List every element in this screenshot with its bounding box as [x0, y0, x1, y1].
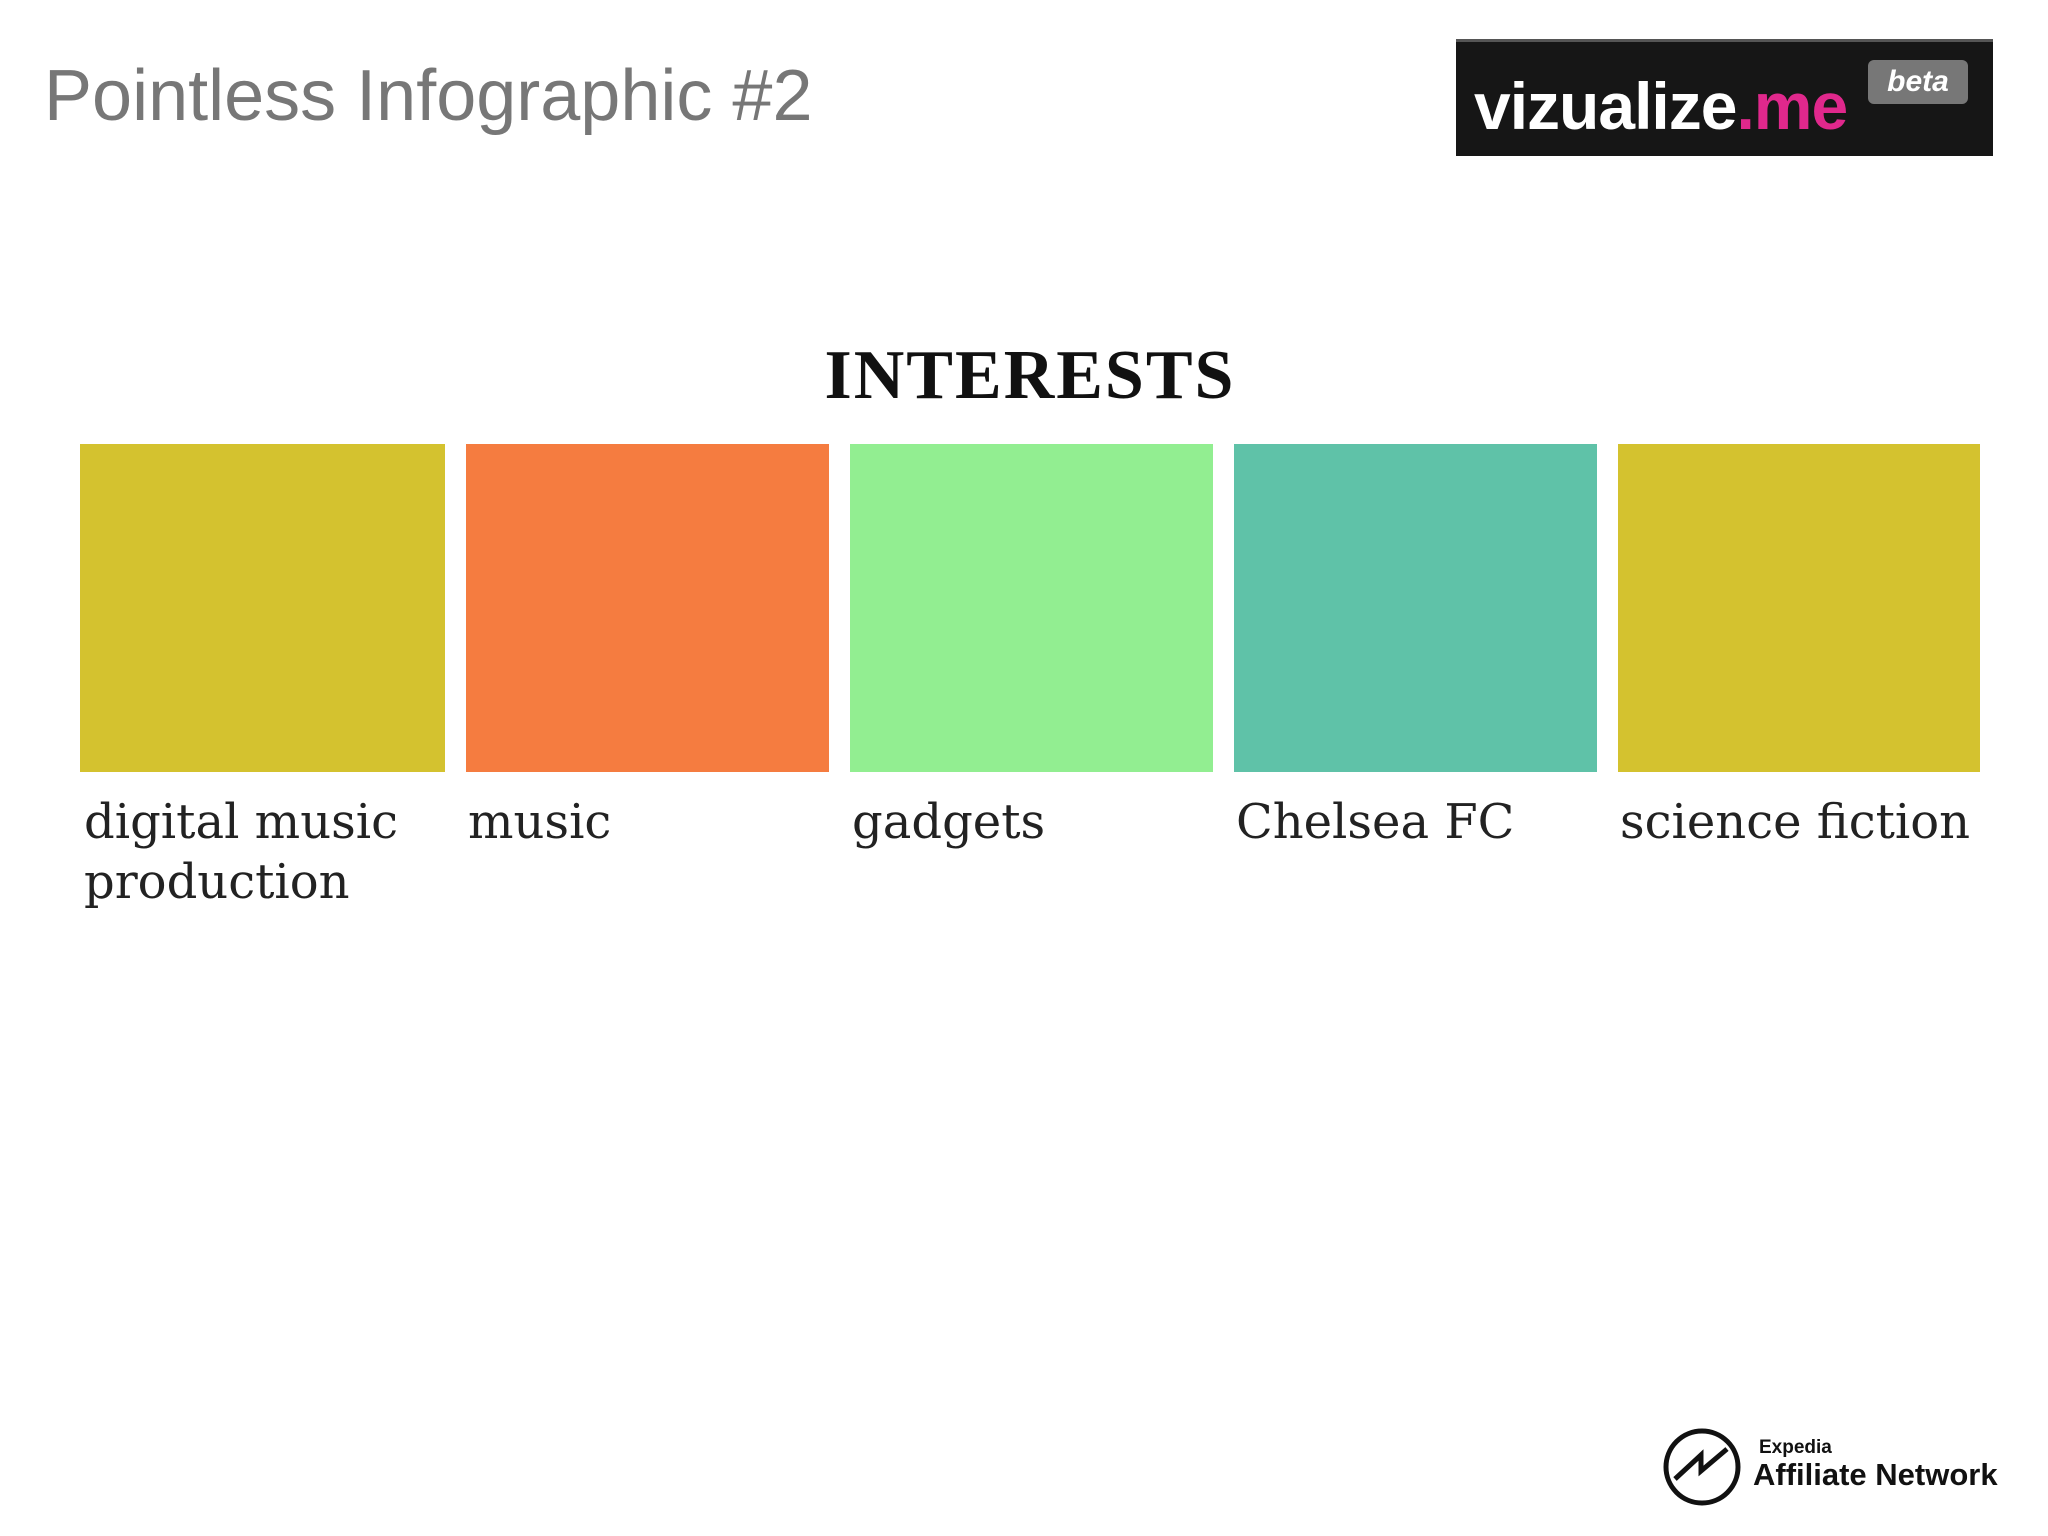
label: digital music production: production: [84, 854, 350, 910]
logo: vizualize.me: beta: [1887, 65, 1949, 98]
logo: Expedia Affiliate Network: Affiliate Network: [1753, 1457, 1998, 1492]
logo: vizualize.me: [1456, 39, 1993, 156]
label: digital music production: digital music: [84, 794, 398, 850]
logo: Expedia Affiliate Network: Expedia: [1759, 1437, 1832, 1458]
box: science fiction: [1618, 444, 1980, 772]
box: Chelsea FC: [1234, 444, 1597, 772]
label: digital music production: [84, 794, 398, 910]
label: science fiction: science fiction: [1620, 794, 1970, 850]
box: music: [466, 444, 829, 772]
heading: INTERESTS: INTERESTS: [825, 337, 1235, 414]
box: digital music production: [80, 444, 445, 772]
logo: Expedia Affiliate Network: [1664, 1428, 1998, 1506]
label: music: music: [468, 794, 611, 850]
label: gadgets: gadgets: [852, 794, 1045, 850]
title: Pointless Infographic #2: [44, 56, 812, 136]
label: Chelsea FC: Chelsea FC: [1236, 794, 1514, 850]
box: gadgets: [850, 444, 1213, 772]
logo: vizualize.me: vizualize.me: [1474, 69, 1847, 143]
